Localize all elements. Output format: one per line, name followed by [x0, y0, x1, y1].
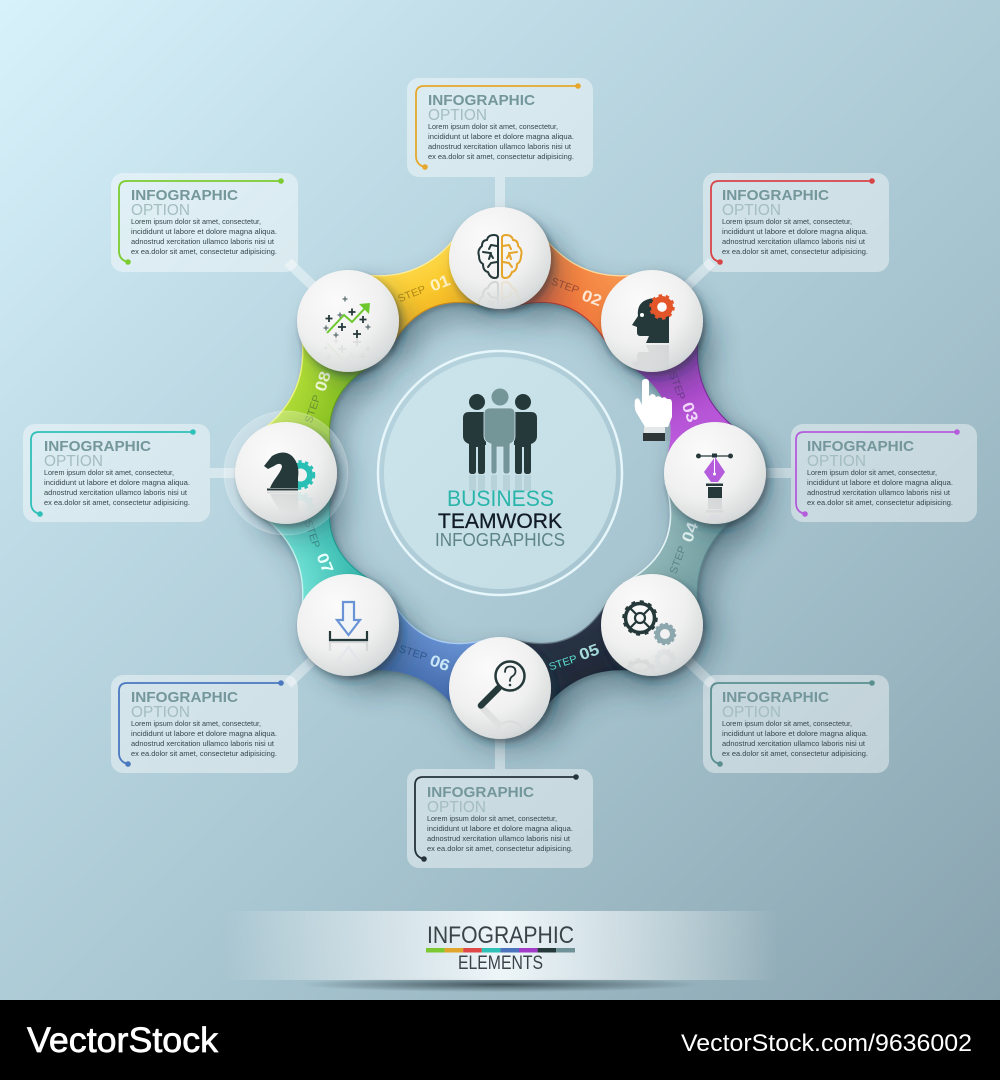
- ribbon: step 07: [249, 473, 381, 627]
- callout 05: adnostrud xercitation ullamco laboris nisi ut: [427, 834, 570, 843]
- label: step 02: [549, 276, 604, 310]
- banner title: ELEMENTS: [458, 952, 543, 974]
- callout 04: OPTION: [722, 704, 781, 721]
- callout 01: [407, 78, 593, 177]
- callout 07: ex ea.dolor sit amet, consectetur adipisicing.: [44, 498, 190, 507]
- callout 02: ex ea.dolor sit amet, consectetur adipisicing.: [722, 247, 868, 256]
- watermark footer: [0, 1000, 1000, 1080]
- center title: BUSINESS: [447, 486, 554, 511]
- callout 07: incididunt ut labore et dolore magna aliqua.: [44, 478, 190, 487]
- label: step 06: 06: [427, 652, 452, 675]
- label: step 07: STEP: [302, 518, 322, 550]
- callout 05: incididunt ut labore et dolore magna aliqua.: [427, 824, 573, 833]
- icon: growth chart: [324, 296, 370, 354]
- callout 07: adnostrud xercitation ullamco laboris nisi ut: [44, 488, 187, 497]
- callout 06: INFOGRAPHIC: [131, 689, 238, 706]
- callout 03: ex ea.dolor sit amet, consectetur adipisicing.: [807, 498, 953, 507]
- ribbon: step 05: [500, 592, 654, 724]
- callout 04: adnostrud xercitation ullamco laboris nisi ut: [722, 739, 865, 748]
- label: step 03: STEP: [666, 370, 687, 402]
- callout 01: ex ea.dolor sit amet, consectetur adipisicing.: [428, 152, 574, 161]
- ribbon: step 01: [346, 222, 500, 354]
- highlighted node: step 07: [224, 411, 348, 535]
- node balls: [297, 207, 766, 739]
- callout 06: incididunt ut labore et dolore magna aliqua.: [131, 729, 277, 738]
- callout 08: ex ea.dolor sit amet, consectetur adipisicing.: [131, 247, 277, 256]
- ribbon: step 08: [249, 319, 381, 473]
- center title: TEAMWORK: [438, 510, 562, 533]
- ribbon: step 02: [500, 222, 654, 354]
- callout 02: INFOGRAPHIC: [722, 187, 829, 204]
- callout 07: OPTION: [44, 453, 103, 470]
- label: step 01: [396, 272, 453, 305]
- callout 07: Lorem ipsum dolor sit amet, consectetur,: [44, 468, 174, 477]
- label: step 05: 05: [577, 641, 602, 664]
- step labels: [302, 272, 702, 675]
- icon: magnifier with question mark: [478, 660, 526, 722]
- callout 03: Lorem ipsum dolor sit amet, consectetur,: [807, 468, 937, 477]
- label: step 03: 03: [678, 400, 701, 425]
- ribbon: step 03: [619, 319, 751, 473]
- callout 02: Lorem ipsum dolor sit amet, consectetur,: [722, 217, 852, 226]
- icon: chess knight with gear: [264, 452, 316, 506]
- callout 07: [23, 424, 210, 522]
- callout 05: [407, 769, 593, 868]
- center title: [435, 486, 565, 550]
- label: step 04: [668, 520, 702, 576]
- callout 05: ex ea.dolor sit amet, consectetur adipisicing.: [427, 844, 573, 853]
- callout 08: INFOGRAPHIC: [131, 187, 238, 204]
- callout 08: incididunt ut labore et dolore magna aliqua.: [131, 227, 277, 236]
- callout 07: INFOGRAPHIC: [44, 438, 151, 455]
- callout 06: adnostrud xercitation ullamco laboris nisi ut: [131, 739, 274, 748]
- callout 06: ex ea.dolor sit amet, consectetur adipisicing.: [131, 749, 277, 758]
- callout 03: adnostrud xercitation ullamco laboris nisi ut: [807, 488, 950, 497]
- callout 04: [703, 675, 889, 773]
- callout 08: Lorem ipsum dolor sit amet, consectetur,: [131, 217, 261, 226]
- label: step 02: 02: [579, 287, 604, 310]
- banner title: [427, 922, 574, 974]
- label: step 08: STEP: [303, 393, 323, 425]
- watermark footer: VectorStock.com/9636002: [681, 1030, 972, 1057]
- ribbon: step 06: [346, 592, 500, 724]
- label: step 02: STEP: [549, 276, 581, 297]
- label: step 04: STEP: [668, 544, 689, 576]
- label: step 06: [397, 643, 452, 675]
- central disc: [378, 351, 622, 595]
- icon: brain: [477, 234, 523, 300]
- callout 01: INFOGRAPHIC: [428, 92, 535, 109]
- watermark footer: VectorStock: [27, 1021, 219, 1060]
- label: step 03: [666, 370, 701, 425]
- callout 02: adnostrud xercitation ullamco laboris nisi ut: [722, 237, 865, 246]
- callout 01: Lorem ipsum dolor sit amet, consectetur,: [428, 122, 558, 131]
- callout connectors: [210, 177, 791, 769]
- label: step 08: [303, 369, 335, 425]
- label: step 07: [302, 518, 336, 576]
- callout 04: incididunt ut labore et dolore magna aliqua.: [722, 729, 868, 738]
- bottom banner: [222, 911, 780, 992]
- callout 04: Lorem ipsum dolor sit amet, consectetur,: [722, 719, 852, 728]
- colour stripe: [426, 948, 575, 952]
- label: step 04: 04: [679, 520, 702, 545]
- callout 05: INFOGRAPHIC: [427, 784, 534, 801]
- label: step 06: STEP: [397, 643, 429, 663]
- center title: INFOGRAPHICS: [435, 529, 565, 550]
- icon: gears: [622, 600, 676, 666]
- label: step 01: 01: [428, 272, 453, 295]
- icon: pointing hand: [635, 379, 672, 441]
- callout 08: adnostrud xercitation ullamco laboris nisi ut: [131, 237, 274, 246]
- icon: download arrow: [328, 600, 368, 654]
- icon: head with gear: [632, 294, 675, 362]
- callout 08: [111, 173, 298, 272]
- callout 02: incididunt ut labore et dolore magna aliqua.: [722, 227, 868, 236]
- callout 02: OPTION: [722, 202, 781, 219]
- callout 03: [791, 424, 977, 522]
- callout 06: [111, 675, 298, 773]
- callout 08: OPTION: [131, 202, 190, 219]
- callout 04: INFOGRAPHIC: [722, 689, 829, 706]
- label: step 08: 08: [313, 369, 335, 394]
- banner title: INFOGRAPHIC: [427, 922, 574, 949]
- callout 06: Lorem ipsum dolor sit amet, consectetur,: [131, 719, 261, 728]
- label: step 05: STEP: [547, 653, 579, 673]
- callout 01: OPTION: [428, 107, 487, 124]
- label: step 05: [547, 641, 602, 673]
- step ribbon ring: [249, 222, 751, 724]
- callout 02: [703, 173, 889, 272]
- callout 04: ex ea.dolor sit amet, consectetur adipisicing.: [722, 749, 868, 758]
- ribbon: step 04: [619, 473, 751, 627]
- callout 01: adnostrud xercitation ullamco laboris nisi ut: [428, 142, 571, 151]
- callout 05: OPTION: [427, 799, 486, 816]
- label: step 07: 07: [313, 551, 336, 576]
- icon: pen nib: [696, 454, 733, 512]
- callout 03: OPTION: [807, 453, 866, 470]
- callout 06: OPTION: [131, 704, 190, 721]
- callout 03: INFOGRAPHIC: [807, 438, 914, 455]
- label: step 01: STEP: [396, 283, 428, 305]
- callout 05: Lorem ipsum dolor sit amet, consectetur,: [427, 814, 557, 823]
- callout 03: incididunt ut labore et dolore magna aliqua.: [807, 478, 953, 487]
- team icon: [463, 388, 537, 491]
- callout 01: incididunt ut labore et dolore magna aliqua.: [428, 132, 574, 141]
